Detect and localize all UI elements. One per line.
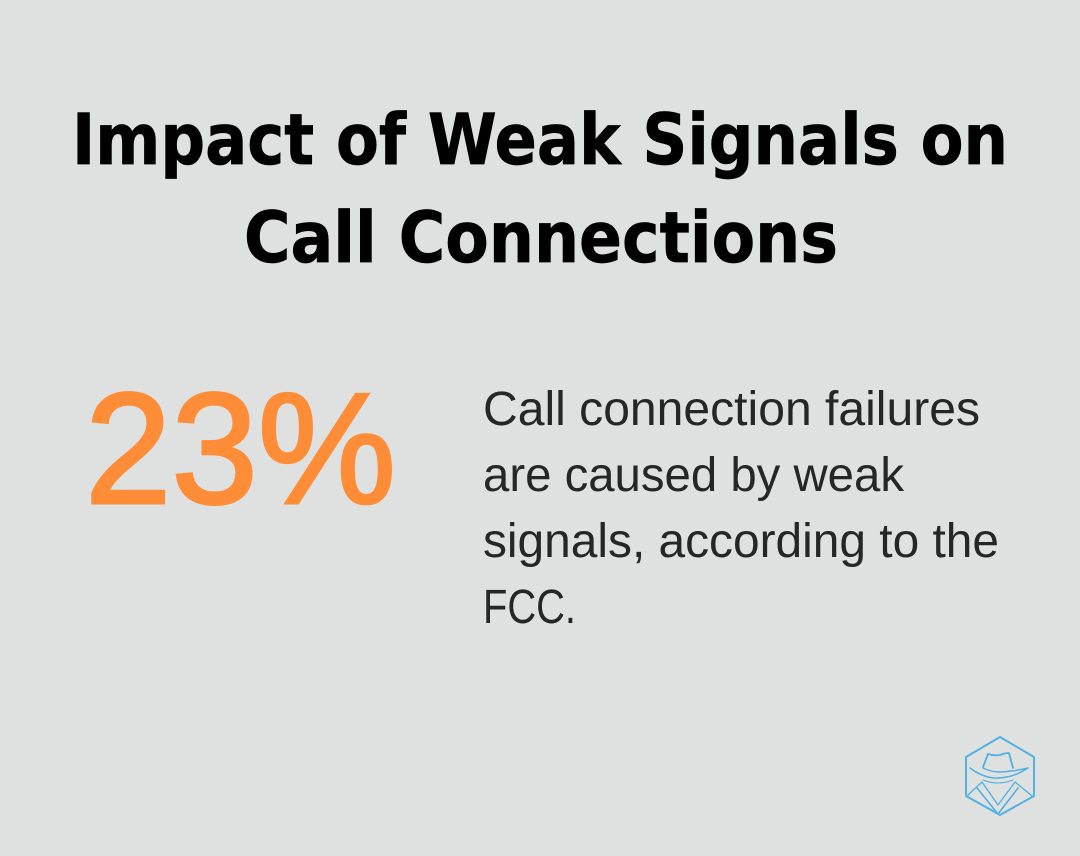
title bbox=[72, 99, 1008, 279]
icon: hexagon logo with hat bbox=[966, 737, 1034, 815]
description text: FCC. bbox=[483, 581, 576, 634]
description text bbox=[483, 383, 999, 634]
description text: are caused by weak bbox=[483, 449, 905, 502]
description text: signals, according to the bbox=[483, 515, 999, 568]
statistic: 23%: 23% bbox=[85, 361, 396, 537]
description text: Call connection failures bbox=[483, 383, 980, 436]
title: Call Connections bbox=[244, 197, 838, 279]
